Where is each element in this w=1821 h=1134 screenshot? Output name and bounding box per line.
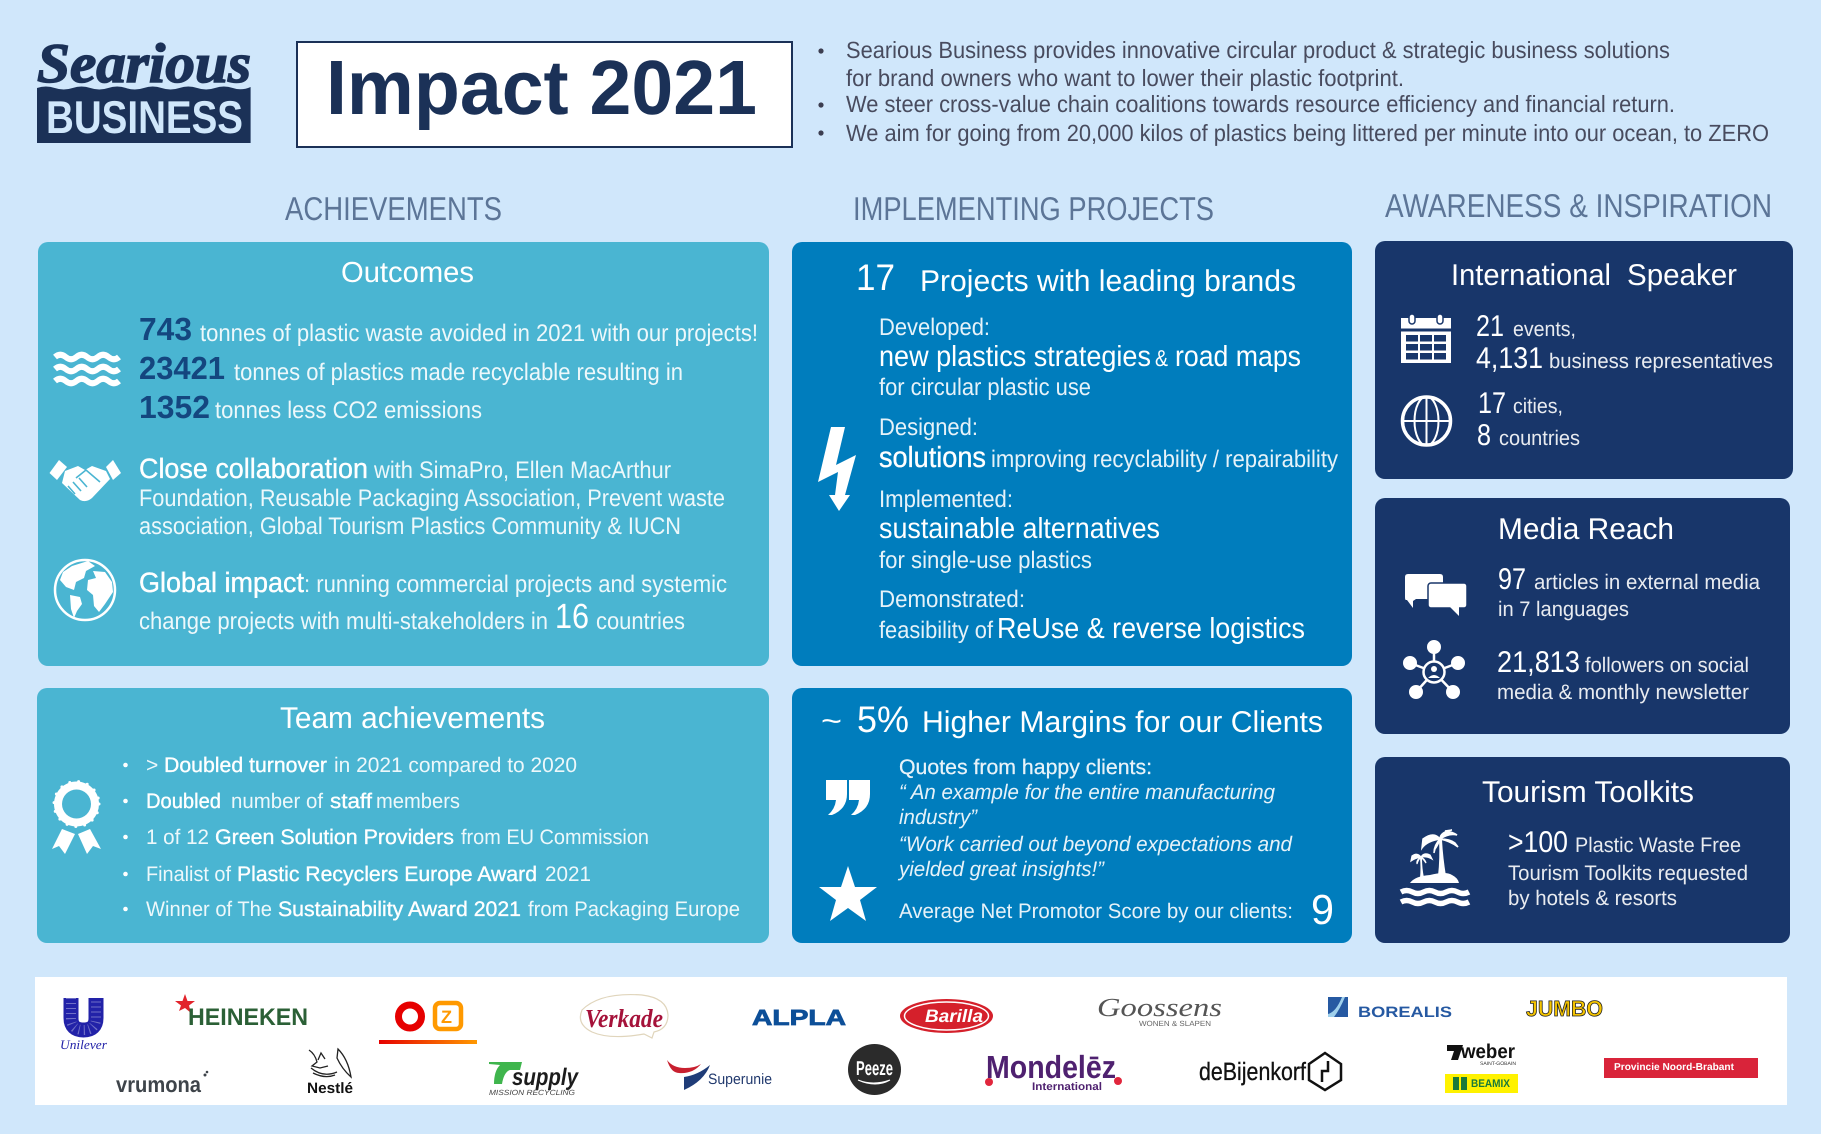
- outcomes figures: tonnes of plastics made recyclable resulting in: [234, 359, 683, 386]
- media articles text: articles in external media: [1534, 571, 1760, 594]
- outcomes figures: tonnes of plastic waste avoided in 2021 with our projects!: [200, 320, 758, 347]
- icon: star: [819, 866, 877, 921]
- logo: Jumbo: JUMBO: [1526, 996, 1603, 1021]
- logo: Superunie: Superunie: [708, 1071, 772, 1088]
- project list: improving recyclability / repairability: [991, 446, 1338, 473]
- team achievement list: Sustainability Award 2021: [278, 898, 521, 921]
- logo: Superunie: [667, 1060, 772, 1090]
- outcomes figures: tonnes less CO2 emissions: [215, 397, 482, 424]
- projects heading: 17: [856, 257, 895, 298]
- panel: projects with leading brands: [792, 242, 1352, 666]
- panel: higher margins: [792, 688, 1352, 943]
- logo: Verkade: [580, 995, 668, 1038]
- margins heading: 5%: [857, 699, 909, 740]
- project list: feasibility of: [879, 617, 993, 644]
- client quotes: “Work carried out beyond expectations and: [899, 833, 1293, 856]
- heading: achievements: ACHIEVEMENTS: [285, 190, 502, 227]
- team achievement list: in 2021 compared to 2020: [334, 754, 577, 777]
- tourism text: Plastic Waste Free: [1575, 834, 1741, 857]
- icon: calendar: [1401, 314, 1451, 363]
- logo: Weber Saint-Gobain: [1447, 1041, 1516, 1067]
- speaker heading: Speaker: [1627, 259, 1737, 292]
- collaboration text: Foundation, Reusable Packaging Association, Prevent waste: [139, 485, 725, 512]
- logo: Provincie Noord-Brabant: [1604, 1058, 1758, 1078]
- client quotes: yielded great insights!”: [897, 858, 1105, 881]
- icon: award ribbon: [52, 782, 101, 854]
- tourism text: [1508, 826, 1748, 910]
- logo: Searious Business: [37, 33, 251, 143]
- logo: rSupply: MISSION RECYCLING: [489, 1088, 575, 1097]
- media heading: Media Reach: [1498, 513, 1674, 546]
- intro bullet text: [818, 37, 1769, 146]
- global impact text: [139, 567, 727, 636]
- icon: waves: [55, 355, 119, 383]
- net promoter score: Average Net Promotor Score by our clients:: [899, 900, 1293, 923]
- margins heading: Higher Margins for our Clients: [922, 706, 1323, 739]
- tourism text: by hotels & resorts: [1508, 887, 1677, 910]
- collaboration text: [139, 453, 725, 540]
- intro bullet text: Searious Business provides innovative circular product & strategic business solutions: [846, 37, 1670, 63]
- logo: Barilla: Barilla: [925, 1006, 983, 1026]
- project list: &: [1155, 345, 1168, 371]
- media followers text: media & monthly newsletter: [1497, 681, 1749, 704]
- global impact text: change projects with multi-stakeholders in: [139, 608, 548, 635]
- media followers text: 21,813: [1497, 646, 1580, 679]
- collaboration text: association, Global Tourism Plastics Community & IUCN: [139, 513, 681, 540]
- team achievement list: number of: [231, 790, 323, 813]
- panel: media reach: [1375, 498, 1790, 734]
- icon: social network: [1404, 640, 1464, 698]
- client quotes: Quotes from happy clients:: [899, 756, 1152, 779]
- project list: road maps: [1175, 341, 1301, 373]
- projects heading: Projects with leading brands: [920, 265, 1296, 298]
- project list: sustainable alternatives: [879, 513, 1160, 545]
- collaboration text: Close collaboration: [139, 453, 368, 484]
- panel: international speaker: [1375, 241, 1793, 479]
- logo: Barilla: [900, 999, 993, 1033]
- logo: Nestle: [307, 1049, 353, 1097]
- team heading: Team achievements: [280, 702, 545, 735]
- logo: Borealis: BOREALIS: [1358, 1004, 1452, 1021]
- media articles text: 97: [1498, 563, 1526, 596]
- tourism text: >100: [1508, 826, 1568, 859]
- logo: Provincie Noord-Brabant: Provincie Noord-Brabant: [1614, 1062, 1735, 1073]
- team achievement list: Doubled turnover: [164, 754, 327, 777]
- project list: Developed:: [879, 314, 990, 341]
- logo: Heineken: [175, 994, 308, 1031]
- project list: Implemented:: [879, 486, 1013, 513]
- logo: Goossens: Goossens: [1097, 993, 1222, 1022]
- team achievement list: Green Solution Providers: [215, 826, 454, 849]
- speaker locations text: countries: [1499, 427, 1580, 450]
- speaker heading: [1451, 259, 1737, 292]
- speaker events text: [1476, 310, 1773, 375]
- global impact text: : running commercial projects and systemic: [304, 571, 727, 598]
- margins heading: ~: [821, 705, 842, 738]
- logo: Goossens: WONEN & SLAPEN: [1139, 1019, 1211, 1028]
- logo: Borealis: [1328, 997, 1452, 1021]
- icon: lightning arrow: [818, 427, 856, 511]
- logo: Peeze: Peeze: [856, 1058, 893, 1080]
- icon: handshake: [50, 460, 121, 501]
- team achievement list: staff: [330, 790, 372, 813]
- logo: de Bijenkorf: deBijenkorf: [1199, 1058, 1306, 1086]
- logo: Vrumona: vrumona: [116, 1072, 202, 1097]
- global impact text: countries: [596, 608, 685, 635]
- client quotes: [897, 756, 1293, 881]
- logo: ALPLA: ALPLA: [752, 1005, 846, 1030]
- logo: VodafoneZiggo: [379, 1003, 477, 1044]
- logo: Searious Business: Searious: [37, 33, 251, 95]
- margins heading: [821, 699, 1323, 740]
- team achievement list: 1 of 12: [146, 826, 209, 849]
- projects heading: [856, 257, 1296, 298]
- speaker events text: 4,131: [1476, 342, 1543, 375]
- collaboration text: with SimaPro, Ellen MacArthur: [373, 457, 671, 484]
- icon: chat bubbles: [1405, 574, 1467, 616]
- project list: for circular plastic use: [879, 374, 1091, 401]
- panel: outcomes: [38, 242, 769, 666]
- global impact text: Global impact: [139, 567, 304, 598]
- team achievement list: Winner of The: [146, 898, 272, 921]
- logo: Beamix: [1445, 1074, 1518, 1093]
- logo: Heineken: HEINEKEN: [188, 1004, 308, 1031]
- speaker locations text: [1477, 387, 1580, 452]
- team achievement list: Finalist of: [146, 863, 231, 886]
- logo: Mondelez: Mondelēz: [986, 1049, 1116, 1085]
- team achievement list: from EU Commission: [461, 826, 649, 849]
- client quotes: “ An example for the entire manufacturing: [899, 781, 1275, 804]
- team achievement list: >: [146, 754, 158, 777]
- intro bullet text: We steer cross-value chain coalitions towards resource efficiency and financial return.: [846, 91, 1675, 117]
- panel: team achievements: [37, 688, 769, 943]
- team achievement list: Doubled: [146, 790, 221, 813]
- speaker events text: business representatives: [1549, 350, 1773, 373]
- logo: Weber Saint-Gobain: SAINT-GOBAIN: [1480, 1061, 1516, 1067]
- team achievement list: [123, 754, 740, 921]
- speaker heading: International: [1451, 259, 1611, 292]
- project list: for single-use plastics: [879, 547, 1092, 574]
- global impact text: 16: [555, 597, 589, 636]
- icon: quotation marks: [826, 780, 870, 815]
- team achievement list: 2021: [545, 863, 591, 886]
- logo: Nestle: Nestlé: [307, 1080, 353, 1097]
- panel: client logo strip: [35, 977, 1787, 1105]
- client quotes: industry”: [899, 806, 978, 829]
- logo: Beamix: BEAMIX: [1471, 1078, 1511, 1090]
- intro bullet text: We aim for going from 20,000 kilos of plastics being littered per minute into our ocean, to ZERO: [846, 120, 1769, 146]
- logo: de Bijenkorf: [1199, 1053, 1341, 1090]
- project list: Demonstrated:: [879, 586, 1025, 613]
- logo: Mondelez: International: [1032, 1081, 1102, 1093]
- speaker events text: 21: [1476, 310, 1504, 343]
- outcomes figures: [139, 311, 758, 425]
- outcomes figures: 1352: [139, 389, 210, 425]
- project list: [879, 314, 1338, 645]
- team achievement list: Plastic Recyclers Europe Award: [237, 863, 537, 886]
- logo: Verkade: Verkade: [585, 1004, 663, 1033]
- project list: Designed:: [879, 414, 978, 441]
- media articles text: [1498, 563, 1760, 621]
- team achievement list: members: [376, 790, 460, 813]
- media articles text: in 7 languages: [1498, 598, 1629, 621]
- logo: VodafoneZiggo: Z: [441, 1007, 452, 1027]
- logo: Peeze: [848, 1044, 901, 1095]
- logo: rSupply: [489, 1062, 579, 1097]
- net promoter score: [899, 886, 1334, 933]
- speaker events text: events,: [1513, 318, 1576, 341]
- outcomes heading: Outcomes: [341, 257, 474, 289]
- team achievement list: from Packaging Europe: [528, 898, 740, 921]
- media followers text: followers on social: [1585, 654, 1749, 677]
- logo: rSupply: supply: [512, 1064, 579, 1091]
- project list: new plastics strategies: [879, 341, 1151, 373]
- icon: palm island: [1401, 830, 1469, 904]
- icon: earth: [55, 560, 115, 620]
- logo: Weber Saint-Gobain: weber: [1460, 1041, 1515, 1063]
- heading: implementing projects: IMPLEMENTING PROJECTS: [853, 190, 1214, 227]
- tourism text: Tourism Toolkits requested: [1508, 862, 1748, 885]
- speaker locations text: cities,: [1513, 395, 1563, 418]
- logo: Searious Business: BUSINESS: [46, 91, 243, 143]
- project list: solutions: [879, 442, 986, 474]
- icon: globe: [1402, 396, 1451, 446]
- logo: Unilever: [60, 998, 108, 1052]
- speaker locations text: 17: [1478, 387, 1506, 420]
- logo: Goossens: [1097, 993, 1222, 1028]
- speaker locations text: 8: [1477, 419, 1491, 452]
- project list: ReUse & reverse logistics: [997, 613, 1305, 645]
- outcomes figures: 23421: [139, 350, 225, 386]
- media followers text: [1497, 646, 1749, 704]
- intro bullet text: for brand owners who want to lower their plastic footprint.: [846, 65, 1404, 91]
- net promoter score: 9: [1311, 886, 1334, 933]
- tourism heading: Tourism Toolkits: [1482, 776, 1694, 809]
- logo: Unilever: Unilever: [60, 1037, 108, 1052]
- title: Impact 2021: Impact 2021: [326, 45, 757, 131]
- outcomes figures: 743: [139, 311, 192, 347]
- panel: tourism toolkits: [1375, 757, 1790, 943]
